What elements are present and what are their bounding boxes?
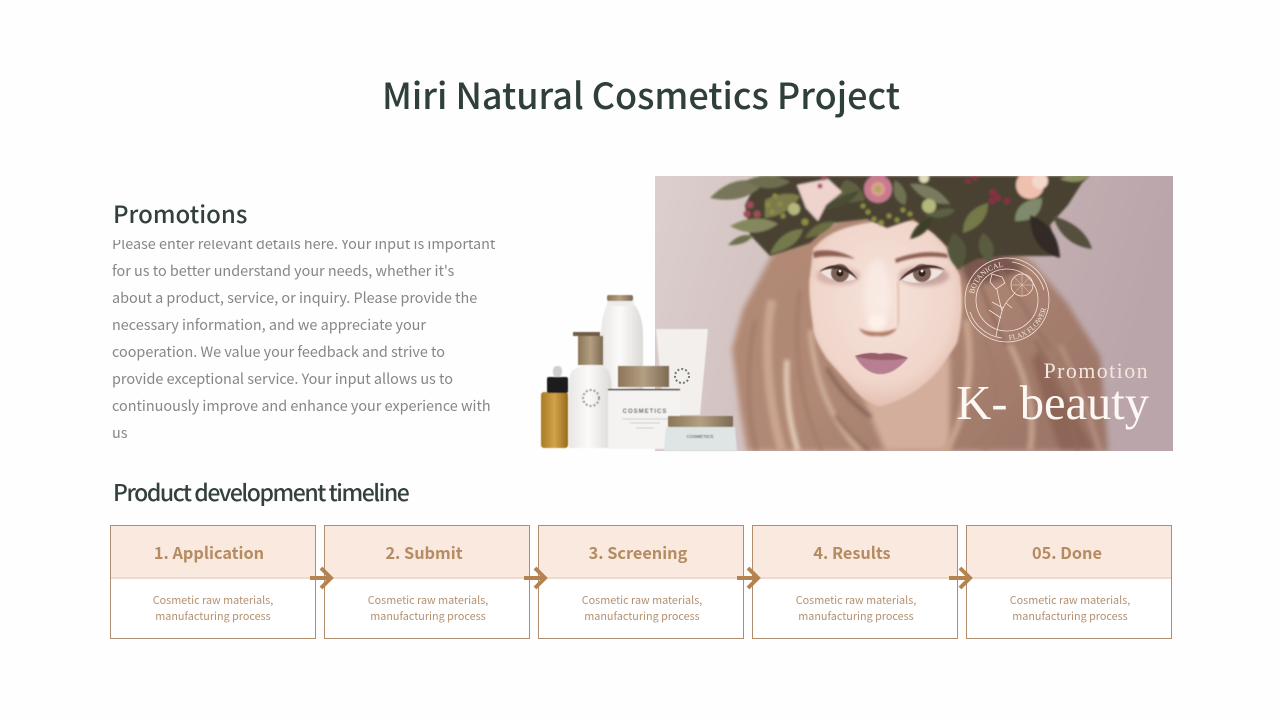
botanical stamp: BOTANICAL [969, 262, 1003, 294]
botanical stamp [964, 258, 1050, 342]
step 2 description: manufacturing process [370, 608, 486, 624]
step 2 [324, 525, 530, 639]
k-beauty text: K- beauty [956, 377, 1150, 430]
step 1 [110, 525, 316, 639]
step 3 description: Cosmetic raw materials, [582, 592, 702, 608]
text block: promotions body: for us to better understand your needs, whether it's [112, 260, 454, 281]
neck [862, 355, 950, 451]
hair [732, 215, 1108, 451]
step 2 heading: 2. Submit [385, 540, 463, 564]
step 5 description [1010, 592, 1130, 624]
flowers [864, 175, 892, 203]
step 1 description [153, 592, 273, 624]
text block: promotions body: provide exceptional service. Your input allows us to [112, 368, 453, 389]
tube [656, 329, 708, 415]
cosmetic products [541, 295, 737, 451]
text block: promotions body: necessary information, and we appreciate your [112, 314, 426, 335]
step 4 description: manufacturing process [798, 608, 914, 624]
heading: promotions: Promotions [113, 195, 247, 230]
step 5 heading [967, 526, 1171, 579]
step 4 [752, 525, 958, 639]
flower crown [710, 171, 1092, 270]
step 5 heading: 05. Done [1032, 540, 1102, 564]
promotion image: model and cosmetic products [540, 176, 1173, 452]
small jar: COSMETICS [687, 434, 713, 439]
eyebrows [813, 250, 855, 259]
text block: promotions body: continuously improve and enhance your experience with [112, 395, 491, 416]
step 4 heading: 4. Results [813, 540, 891, 564]
step 1 description: manufacturing process [155, 608, 271, 624]
hair strands [749, 270, 1100, 451]
text block: promotions body: about a product, service, or inquiry. Please provide the [112, 287, 477, 308]
berries [744, 176, 826, 218]
tube label [675, 369, 689, 383]
step 5 [966, 525, 1172, 639]
step 4 description [796, 592, 916, 624]
lips [855, 353, 908, 374]
step 1 heading: 1. Application [154, 540, 264, 564]
step 2 description: Cosmetic raw materials, [368, 592, 488, 608]
eyes [816, 264, 949, 286]
step 3 description: manufacturing process [584, 608, 700, 624]
lid jar box [608, 366, 680, 449]
step 3 heading [539, 526, 743, 579]
botanical stamp: FLAX FLOWER [1008, 308, 1046, 340]
arrow 4 [949, 566, 973, 590]
step 4 heading [753, 526, 957, 579]
leaves [710, 180, 763, 200]
heading: product development timeline: Product development timeline [113, 474, 408, 508]
step 5 description: manufacturing process [1012, 608, 1128, 624]
step 4 description: Cosmetic raw materials, [796, 592, 916, 608]
step 2 description [368, 592, 488, 624]
step 5 description: Cosmetic raw materials, [1010, 592, 1130, 608]
arrow 1 [310, 566, 334, 590]
pump bottle [569, 332, 612, 448]
tall bottle [601, 295, 643, 400]
step 1 heading [111, 526, 315, 579]
promo text: Promotion [1044, 358, 1149, 383]
lid jar box: COSMETICS [623, 409, 667, 415]
nose [859, 328, 897, 336]
text block: promotions body: cooperation. We value your feedback and strive to [112, 341, 445, 362]
step 1 description: Cosmetic raw materials, [153, 592, 273, 608]
step 3 [538, 525, 744, 639]
text block: promotions body [112, 240, 495, 443]
step 3 heading: 3. Screening [589, 540, 687, 564]
small jar [664, 416, 737, 451]
arrow 2 [524, 566, 548, 590]
face [809, 221, 962, 406]
title: Miri Natural Cosmetics Project [382, 68, 900, 120]
arrow 3 [737, 566, 761, 590]
step 3 description [582, 592, 702, 624]
text block: promotions body: us [112, 422, 127, 443]
amber dropper bottle [541, 366, 568, 448]
step 2 heading [325, 526, 529, 579]
photo background [655, 176, 1173, 451]
